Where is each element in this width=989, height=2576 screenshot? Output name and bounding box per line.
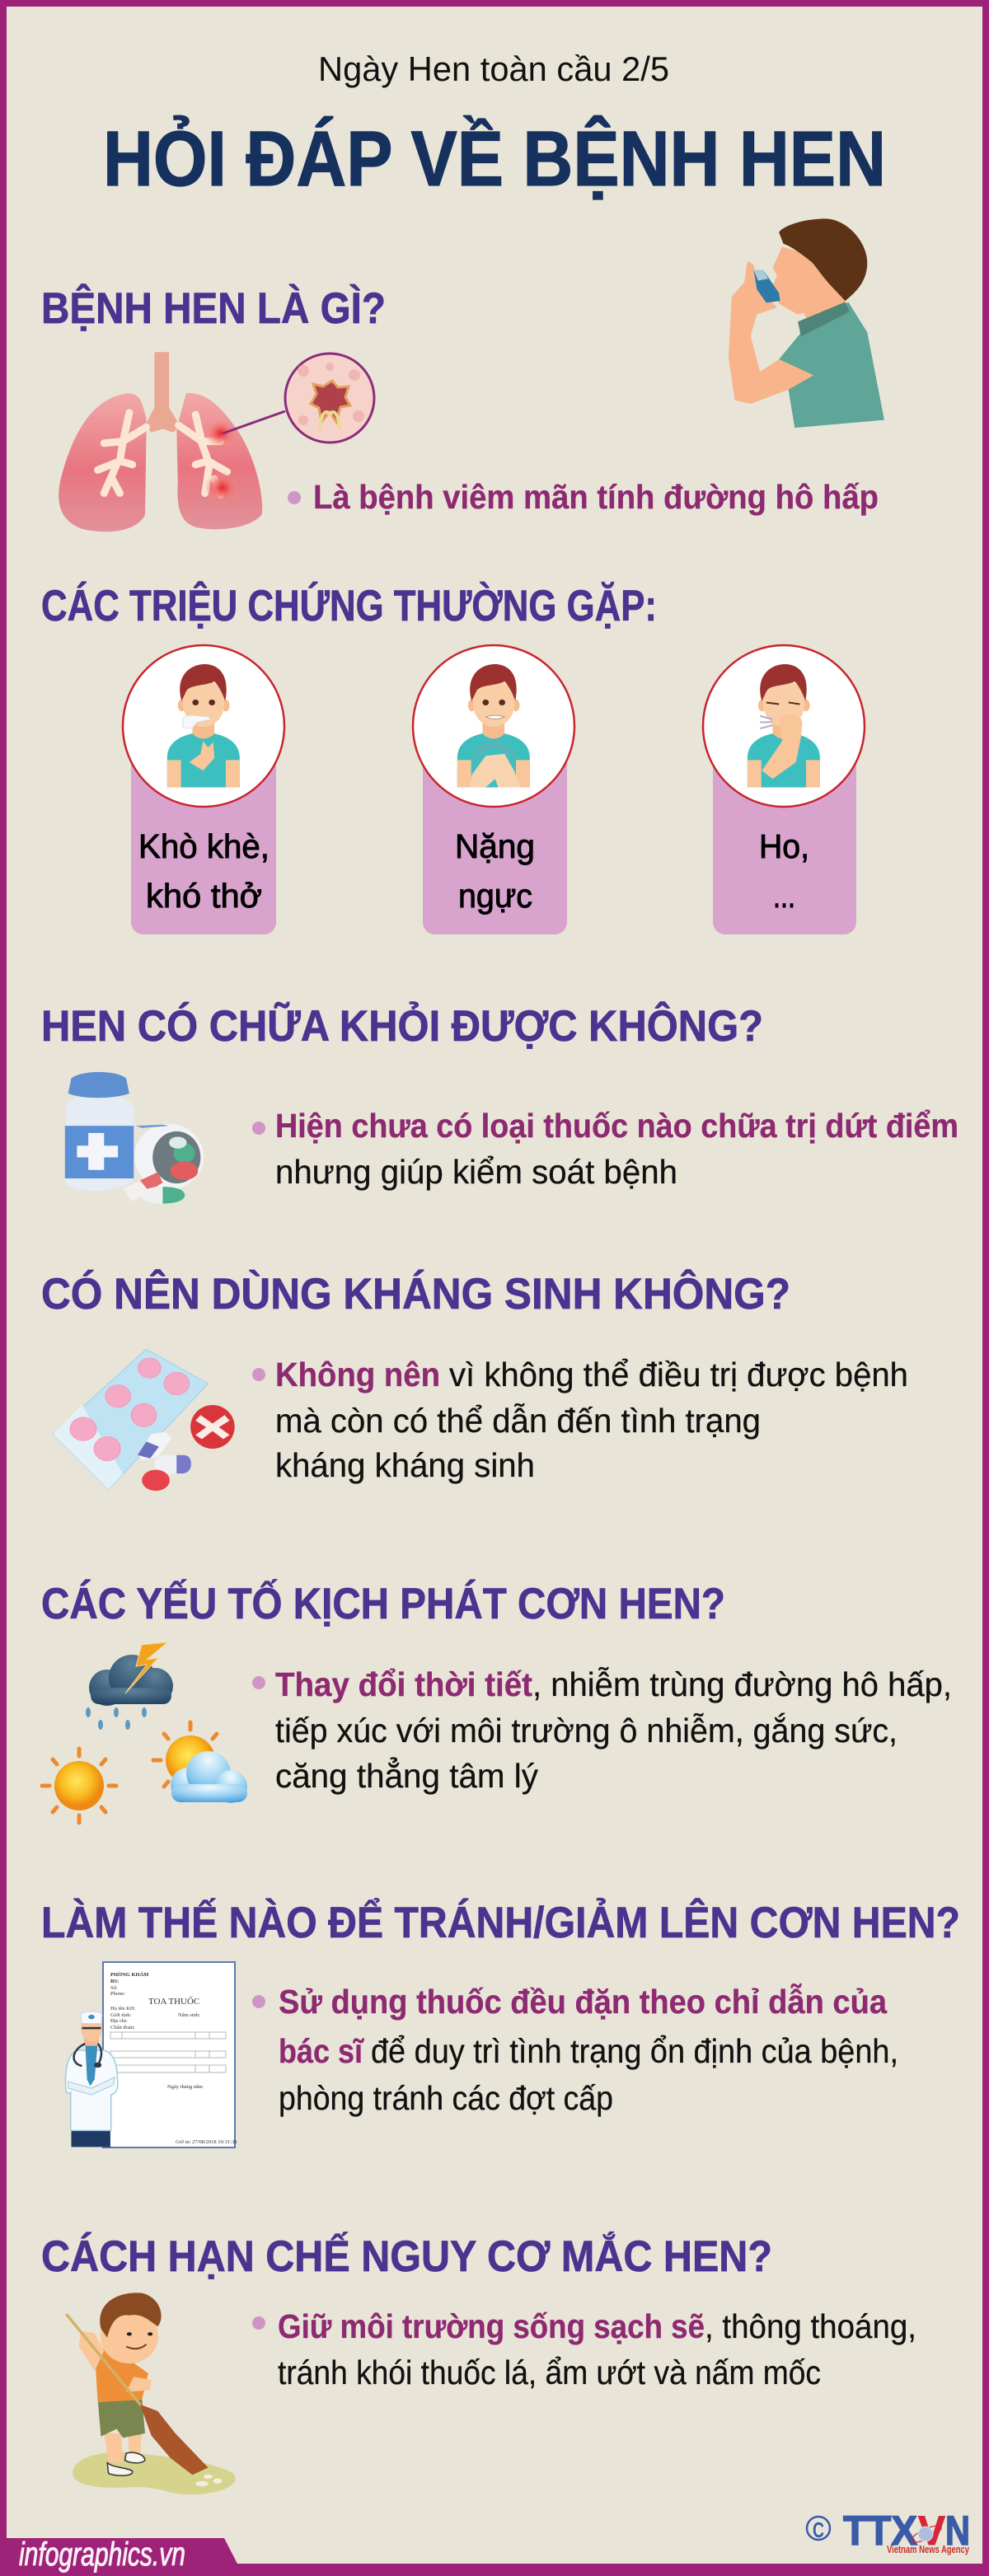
symptom card: wheezing, shortness of breath: khó thở — [146, 877, 262, 915]
illustration: prescription sheet: Số: — [110, 1985, 118, 1991]
symptom card: cough: ... — [773, 877, 795, 915]
illustration: medicine bottle and pills — [65, 1072, 204, 1204]
illustration: prescription sheet: Ngày tháng năm — [167, 2084, 203, 2090]
illustration: prescription sheet: Giờ in: 27/08/2018 10:31:38 — [176, 2139, 237, 2145]
logo: TTXVN copyright: V — [918, 2508, 946, 2554]
bullet text: avoiding attacks: phòng tránh các đợt cấp — [279, 2079, 613, 2117]
heading: should antibiotics be used: CÓ NÊN DÙNG KHÁNG SINH KHÔNG? — [41, 1268, 790, 1318]
symptom card: cough — [703, 645, 865, 934]
illustration: prescription sheet — [103, 1962, 237, 2147]
illustration: prescription sheet: Giới tính: — [110, 2012, 131, 2018]
symptom card: chest tightness: Nặng — [455, 827, 535, 865]
bullet text: antibiotics: Không nên — [275, 1356, 440, 1393]
illustration: doctor — [65, 2012, 118, 2147]
illustration: lungs with airway magnifier — [59, 352, 374, 532]
bullet text: reduce risk — [252, 2307, 916, 2391]
illustration: boy sweeping — [66, 2293, 235, 2494]
bullet text: antibiotics: kháng kháng sinh — [275, 1446, 535, 1484]
heading: can asthma be cured: HEN CÓ CHỮA KHỎI ĐƯỢC KHÔNG? — [41, 1000, 763, 1051]
bullet text: triggers: Thay đổi thời tiết — [275, 1665, 532, 1703]
symptom card: chest tightness: ngực — [458, 877, 532, 915]
logo: TTXVN copyright: C — [813, 2517, 824, 2542]
illustration: blister pack and pills with red cross — [53, 1349, 235, 1491]
heading: common symptoms: CÁC TRIỆU CHỨNG THƯỜNG GẶP: — [41, 580, 657, 630]
bullet text: antibiotics — [252, 1356, 908, 1484]
illustration: prescription sheet: TOA THUỐC — [148, 1996, 199, 2007]
heading: reduce risk: CÁCH HẠN CHẾ NGUY CƠ MẮC HEN? — [41, 2231, 772, 2281]
bullet text: no cure: nhưng giúp kiểm soát bệnh — [275, 1153, 677, 1191]
subtitle: Ngày Hen toàn cầu 2/5 — [318, 49, 669, 88]
bullet text: triggers: tiếp xúc với môi trường ô nhiễm, gắng sức, — [275, 1712, 898, 1749]
bullet text: triggers: , nhiễm trùng đường hô hấp, — [532, 1665, 952, 1703]
heading: triggers: CÁC YẾU TỐ KỊCH PHÁT CƠN HEN? — [41, 1579, 725, 1628]
illustration: prescription sheet: BS: — [110, 1979, 119, 1984]
illustration: prescription sheet: Chẩn đoán: — [110, 2025, 135, 2030]
bullet text: reduce risk: Giữ môi trường sống sạch sẽ — [278, 2307, 705, 2345]
illustration: prescription sheet: Họ tên KH: — [110, 2006, 136, 2012]
bullet text: triggers: căng thẳng tâm lý — [275, 1757, 538, 1795]
bullet text: avoiding attacks: Sử dụng thuốc đều đặn theo chỉ dẫn của — [279, 1983, 888, 2021]
illustration: prescription sheet: PHÒNG KHÁM — [110, 1971, 148, 1978]
logo: TTXVN copyright: N — [945, 2508, 970, 2554]
symptom card: wheezing, shortness of breath: Khò khè, — [138, 827, 270, 865]
bullet text: reduce risk: tránh khói thuốc lá, ẩm ướt và nấm mốc — [278, 2354, 821, 2391]
heading: what is asthma: BỆNH HEN LÀ GÌ? — [41, 283, 386, 333]
illustration: prescription sheet: Địa chỉ: — [110, 2018, 128, 2024]
illustration: weather icons — [42, 1642, 247, 1823]
illustration: prescription sheet: Phone: — [110, 1991, 125, 1997]
illustration: prescription sheet: Năm sinh: — [178, 2012, 200, 2018]
bullet text: antibiotics: mà còn có thể dẫn đến tình trạng — [275, 1402, 761, 1440]
bullet text: no cure — [252, 1107, 959, 1191]
illustration: man using inhaler — [729, 218, 884, 428]
bullet text: avoiding attacks: để duy trì tình trạng ổn định của bệnh, — [371, 2032, 898, 2070]
bullet text: antibiotics: vì không thể điều trị được bệnh — [449, 1356, 908, 1393]
bullet text: reduce risk: , thông thoáng, — [705, 2307, 916, 2345]
bullet text: definition: Là bệnh viêm mãn tính đường hô hấp — [313, 478, 879, 516]
bullet text: avoiding attacks: bác sĩ — [279, 2032, 364, 2070]
logo: TTXVN copyright: TTX — [843, 2508, 917, 2554]
footer: website: infographics.vn — [19, 2536, 185, 2573]
symptom card: chest tightness — [413, 645, 574, 934]
bullet text: triggers — [252, 1665, 952, 1795]
bullet text: avoiding attacks — [252, 1983, 898, 2117]
symptom card: wheezing, shortness of breath — [123, 645, 284, 934]
logo: TTXVN copyright — [807, 2508, 970, 2555]
symptom card: cough: Ho, — [759, 827, 809, 865]
title: HỎI ĐÁP VỀ BỆNH HEN — [103, 115, 886, 203]
